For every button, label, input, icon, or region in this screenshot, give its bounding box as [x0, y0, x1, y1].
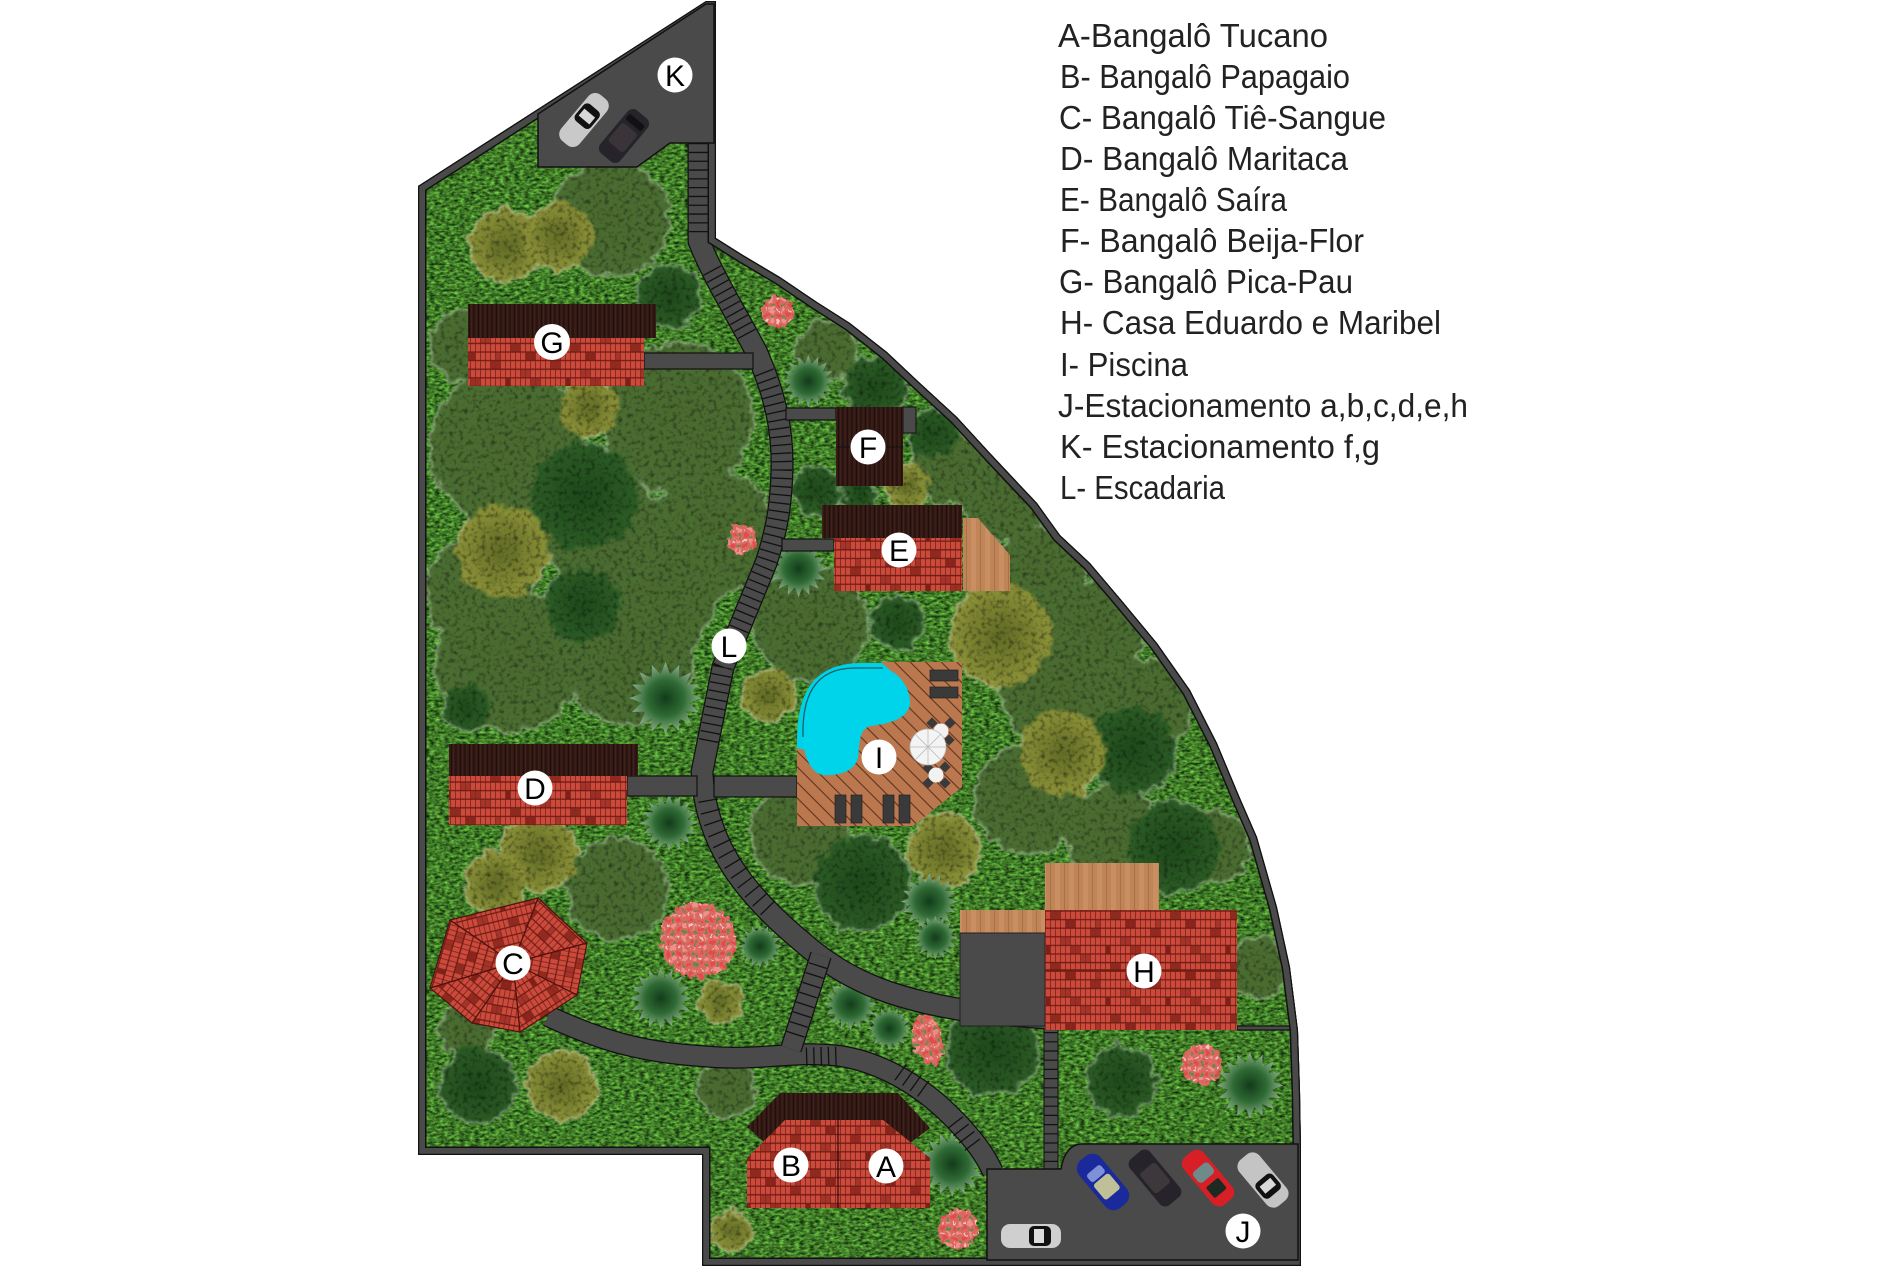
- building C: [430, 898, 587, 1032]
- pool deck I: [797, 662, 962, 826]
- legend: H- Casa Eduardo e Maribel: [1060, 304, 1441, 341]
- car: blue: [1072, 1149, 1134, 1215]
- legend: [1058, 17, 1468, 506]
- flowers: [660, 296, 1222, 1249]
- site plan: [400, 0, 1320, 1267]
- pool deck I: I: [875, 742, 883, 775]
- legend: B- Bangalô Papagaio: [1060, 58, 1350, 95]
- umbrella and tables: [934, 724, 948, 738]
- legend: F- Bangalô Beija-Flor: [1060, 222, 1364, 259]
- building C: C: [502, 948, 524, 981]
- label L: L: [721, 631, 737, 664]
- label J: [1226, 1214, 1260, 1249]
- car: silver horizontal: [1001, 1224, 1061, 1248]
- buildings A and B: B: [781, 1150, 801, 1183]
- loungers: [835, 670, 958, 823]
- car: red: [1178, 1146, 1238, 1210]
- legend: A-Bangalô Tucano: [1058, 17, 1328, 54]
- connector walkways: [627, 353, 1293, 1030]
- buildings A and B: [747, 1093, 930, 1208]
- car: silver K: [556, 89, 612, 151]
- chairs: [922, 717, 956, 789]
- palms: [629, 355, 1283, 1197]
- buildings A and B: A: [876, 1151, 896, 1184]
- car: silver: [1234, 1149, 1292, 1211]
- building G: G: [540, 327, 564, 360]
- building H: [960, 863, 1237, 1030]
- building D: [449, 744, 638, 825]
- building E: [822, 505, 1010, 591]
- building G: [468, 304, 656, 386]
- parking K: [538, 4, 714, 167]
- car: dark K: [596, 106, 652, 166]
- pool water: [797, 663, 890, 750]
- legend: D- Bangalô Maritaca: [1060, 140, 1349, 177]
- building F: F: [859, 432, 877, 465]
- legend: G- Bangalô Pica-Pau: [1059, 263, 1353, 300]
- legend: L- Escadaria: [1060, 469, 1226, 506]
- car: black: [1126, 1147, 1184, 1209]
- legend: E- Bangalô Saíra: [1060, 181, 1288, 218]
- trees: [424, 160, 1287, 1251]
- label K: [658, 58, 692, 93]
- legend: C- Bangalô Tiê-Sangue: [1059, 99, 1386, 136]
- building H: H: [1133, 956, 1155, 989]
- stairway paths L: [548, 143, 1051, 1172]
- building E: E: [889, 535, 909, 568]
- legend: K- Estacionamento f,g: [1060, 428, 1380, 465]
- label L: [712, 628, 746, 664]
- label J: J: [1236, 1216, 1250, 1249]
- legend: I- Piscina: [1060, 346, 1189, 383]
- building D: D: [524, 773, 546, 806]
- label K: K: [665, 60, 685, 93]
- site boundary wall: [418, 1, 1301, 1266]
- legend: J-Estacionamento a,b,c,d,e,h: [1058, 387, 1468, 424]
- building F: [836, 407, 916, 486]
- grass ground: [400, 0, 1320, 1267]
- parking J: [987, 1144, 1298, 1260]
